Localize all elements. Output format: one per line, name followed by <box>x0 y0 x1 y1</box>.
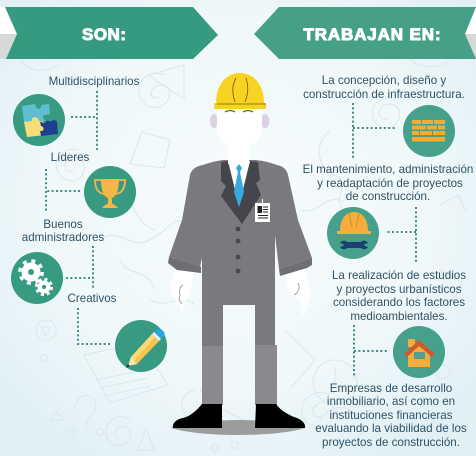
text: mantenimiento <box>303 163 473 203</box>
icon: pencil <box>115 320 167 372</box>
text: Buenos administradores: Buenos <box>43 218 83 231</box>
trousers <box>202 345 277 405</box>
figure: engineer <box>168 73 312 435</box>
icon: bricks <box>403 105 455 157</box>
text: concepción <box>303 74 465 101</box>
connector: helmet <box>385 207 416 264</box>
jacket <box>169 160 312 346</box>
text: Líderes: Líderes <box>51 151 90 164</box>
badge <box>255 199 270 222</box>
face <box>217 107 262 148</box>
shadow <box>171 420 305 435</box>
eyebrows <box>225 110 253 112</box>
tie <box>234 164 244 207</box>
text: mantenimiento: de construcción. <box>346 190 430 203</box>
icon: gears <box>11 252 63 304</box>
heading: SON: SON: <box>82 25 126 44</box>
text: estudios: medioambientales. <box>350 310 448 323</box>
text: empresas: proyectos de construcción. <box>322 436 460 449</box>
text: mantenimiento: y readaptación de proyectos <box>317 177 463 190</box>
text: empresas <box>315 382 467 449</box>
text: estudios: considerando los factores <box>333 296 465 309</box>
shirt <box>228 161 250 206</box>
heading: TRABAJAN EN: TRABAJAN EN: <box>304 25 440 44</box>
text: concepción: construcción de infraestructura. <box>303 88 465 101</box>
lapels <box>221 161 261 224</box>
connector: puzzle <box>71 91 97 150</box>
text: estudios <box>332 269 466 323</box>
hand: right <box>286 266 311 316</box>
shoes <box>173 404 222 428</box>
text: Creativos: Creativos <box>68 292 117 305</box>
banner: SON <box>0 7 218 59</box>
hard hat <box>214 73 266 109</box>
connector: gears <box>66 246 93 288</box>
connector: trophy <box>46 169 80 212</box>
connector: bricks <box>353 103 396 160</box>
connector: pencil <box>78 308 110 344</box>
text: estudios: y proyectos urbanísticos <box>336 283 462 296</box>
banner: TRABAJAN EN <box>254 7 476 59</box>
hand: left <box>171 264 195 316</box>
right list: Trabajan en <box>303 74 473 449</box>
text: Multidisciplinarios: Multidisciplinarios <box>49 75 140 88</box>
text: Buenos administradores <box>22 218 104 244</box>
left list: Son <box>11 75 167 372</box>
text: estudios: La realización de estudios <box>332 269 466 282</box>
text: Buenos administradores: administradores <box>22 231 104 244</box>
connector: house <box>354 325 387 378</box>
text: empresas: Empresas de desarrollo <box>330 382 452 395</box>
icon: helmet and wrench <box>327 207 379 259</box>
buttons <box>236 227 240 273</box>
neck <box>228 140 249 164</box>
text: mantenimiento: El mantenimiento, administración <box>303 163 473 176</box>
text: empresas: inmobiliario, así como en <box>327 395 455 408</box>
text: empresas: instituciones financieras <box>329 409 453 422</box>
icon: house <box>393 326 445 378</box>
icon: trophy <box>84 166 136 218</box>
text: empresas: evaluando la viabilidad de los <box>315 422 467 435</box>
cuffs <box>168 257 201 273</box>
text: concepción: La concepción, diseño y <box>322 74 446 87</box>
icon: puzzle <box>13 94 65 146</box>
ears <box>210 114 218 128</box>
